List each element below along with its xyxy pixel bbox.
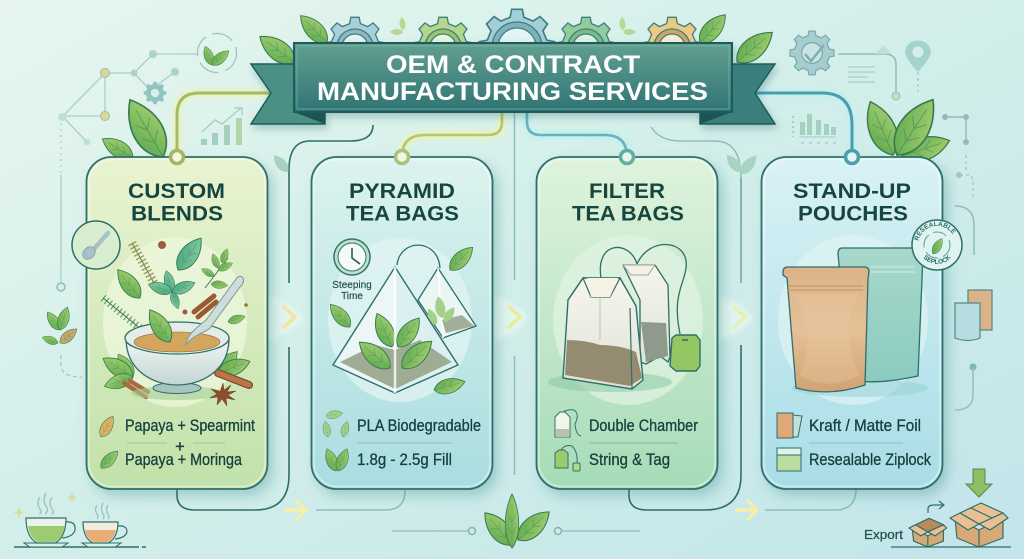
- feature text: papaya moringa: Papaya + Moringa: [125, 451, 243, 469]
- icon: recycle leaf circle: [198, 34, 236, 72]
- small sparkle leaves by gears: [390, 17, 636, 35]
- node: [396, 150, 408, 164]
- feature icon: two leaves: [322, 447, 352, 473]
- arrow: bottom left: [286, 501, 306, 519]
- heading: TEA BAGS: [346, 202, 459, 226]
- green down arrow: [966, 469, 992, 497]
- title line one: OEM & CONTRACT: [386, 51, 640, 79]
- divider with plus: +: [175, 438, 185, 456]
- arrow: chevron between cards one and two: [284, 307, 295, 327]
- export label: Export: [864, 528, 904, 542]
- feature icon: recycle leaves: [322, 409, 351, 438]
- icon: clock: [334, 239, 370, 275]
- feature text: kraft matte foil: Kraft / Matte Foil: [809, 417, 921, 435]
- feature text: fill: 1.8g - 2.5g Fill: [357, 451, 452, 469]
- panel: pyramid tea bags: [312, 150, 492, 489]
- card inner highlight: [764, 160, 940, 486]
- feature icon: double chamber bag: [555, 410, 581, 437]
- divider with plus: [127, 438, 225, 456]
- connector line between cards one and two: [177, 125, 373, 510]
- panel: custom blends: [86, 150, 268, 489]
- feature text: pla: PLA Biodegradable: [357, 417, 481, 435]
- bottom sprout with line nodes: [392, 494, 640, 551]
- title banner: [251, 43, 775, 124]
- right ribbon fold: [700, 112, 732, 124]
- top right connector decoration: [838, 45, 974, 255]
- steeping time label: Steeping: [332, 280, 372, 291]
- right ribbon tail: [700, 64, 775, 124]
- glowing connector: pyramid: [402, 110, 502, 157]
- icon: location pin: [905, 40, 931, 92]
- arrow: chevron between cards two and three: [509, 307, 520, 327]
- export boxes: [864, 469, 1011, 547]
- card body: [762, 157, 942, 489]
- icon: growth bars left: [201, 108, 242, 145]
- panel: stand-up pouches: [759, 148, 963, 502]
- illustration: mortar bowl with herbs: [99, 233, 253, 406]
- heading: [572, 179, 684, 226]
- steeping time label: [332, 280, 372, 302]
- card body: [86, 157, 268, 489]
- resealable seal badge: SEPLOCK: [924, 254, 952, 264]
- heading: [346, 179, 459, 226]
- feature icon: ziplock: [777, 448, 801, 471]
- heading: TEA BAGS: [572, 202, 684, 226]
- icon: sprout right of third card: [651, 127, 761, 178]
- left ribbon tail: [251, 64, 325, 124]
- illustration: filter bags with tag: [548, 244, 700, 392]
- feature text: papaya spearmint: Papaya + Spearmint: [125, 417, 255, 435]
- resealable seal badge: [911, 219, 963, 271]
- connector line between cards three and four: [629, 178, 754, 510]
- feature icon: string and tag: [555, 446, 580, 471]
- feature text: string and tag: String & Tag: [589, 451, 670, 469]
- feature icon: kraft and foil: [777, 413, 802, 438]
- feature icon: moringa leaf: [97, 447, 122, 472]
- heading: FILTER: [589, 179, 665, 203]
- leaves above card one: [98, 92, 176, 165]
- floating leaves: [325, 242, 478, 397]
- panel: filter tea bags: [536, 150, 718, 489]
- arrow: bottom right: [737, 501, 757, 519]
- large box: [950, 503, 1008, 547]
- card inner highlight: [314, 160, 490, 486]
- tea cups: [14, 492, 146, 547]
- heading: [793, 179, 911, 226]
- feature icon: papaya leaf: [96, 414, 118, 440]
- mini pouches right: [955, 290, 992, 340]
- export base line: [891, 546, 1011, 548]
- card inner highlight: [539, 160, 715, 486]
- heading: CUSTOM: [128, 179, 225, 203]
- illustration: stand-up pouches: [783, 248, 928, 397]
- banner inner line: [297, 46, 729, 109]
- card inner highlight: [89, 160, 265, 486]
- divider: [809, 442, 903, 444]
- left ribbon fold: [294, 112, 325, 124]
- glowing connector: filter: [527, 110, 627, 157]
- icon: bar chart right: [793, 114, 836, 143]
- heading: STAND-UP: [793, 179, 911, 203]
- icon: settings gear top right: [790, 31, 834, 75]
- title line two: MANUFACTURING SERVICES: [317, 78, 708, 106]
- glowing connector: custom blends: [177, 93, 272, 157]
- card body: [312, 157, 492, 489]
- connector line between cards two and three: [493, 113, 529, 475]
- node: [170, 150, 184, 164]
- leaves above card four: [858, 92, 953, 167]
- left leaf cluster: [41, 306, 82, 377]
- banner body: [294, 43, 732, 112]
- leaves around banner: [254, 9, 779, 71]
- illustration halo: [778, 235, 928, 405]
- top left network decoration: [57, 50, 198, 291]
- heading: POUCHES: [798, 202, 908, 226]
- node: [846, 150, 858, 164]
- heading: [128, 179, 225, 226]
- gears behind banner: [325, 9, 702, 85]
- divider: [357, 442, 452, 444]
- right lower connector: [955, 364, 976, 410]
- illustration halo: [553, 235, 703, 405]
- card body: [536, 157, 718, 489]
- illustration halo: [328, 238, 472, 402]
- steeping time label: Time: [341, 291, 363, 302]
- illustration: pyramid bags: [333, 245, 476, 393]
- icon: spoon badge: [72, 221, 120, 269]
- small arrow: [928, 501, 944, 513]
- arrow: chevron between cards three and four: [734, 307, 745, 327]
- divider: [589, 442, 678, 444]
- feature text: double chamber: Double Chamber: [589, 417, 698, 435]
- small box: [909, 518, 947, 547]
- thin connectors under cards: [316, 489, 856, 510]
- feature text: resealable ziplock: Resealable Ziplock: [809, 451, 932, 469]
- node: [620, 150, 634, 164]
- icon: small gear: [144, 82, 166, 104]
- heading: PYRAMID: [349, 179, 455, 203]
- heading: BLENDS: [131, 202, 223, 226]
- resealable seal badge: RESEALABLE: [914, 222, 956, 241]
- illustration halo: [103, 237, 247, 407]
- glowing connector: pouches: [752, 93, 852, 157]
